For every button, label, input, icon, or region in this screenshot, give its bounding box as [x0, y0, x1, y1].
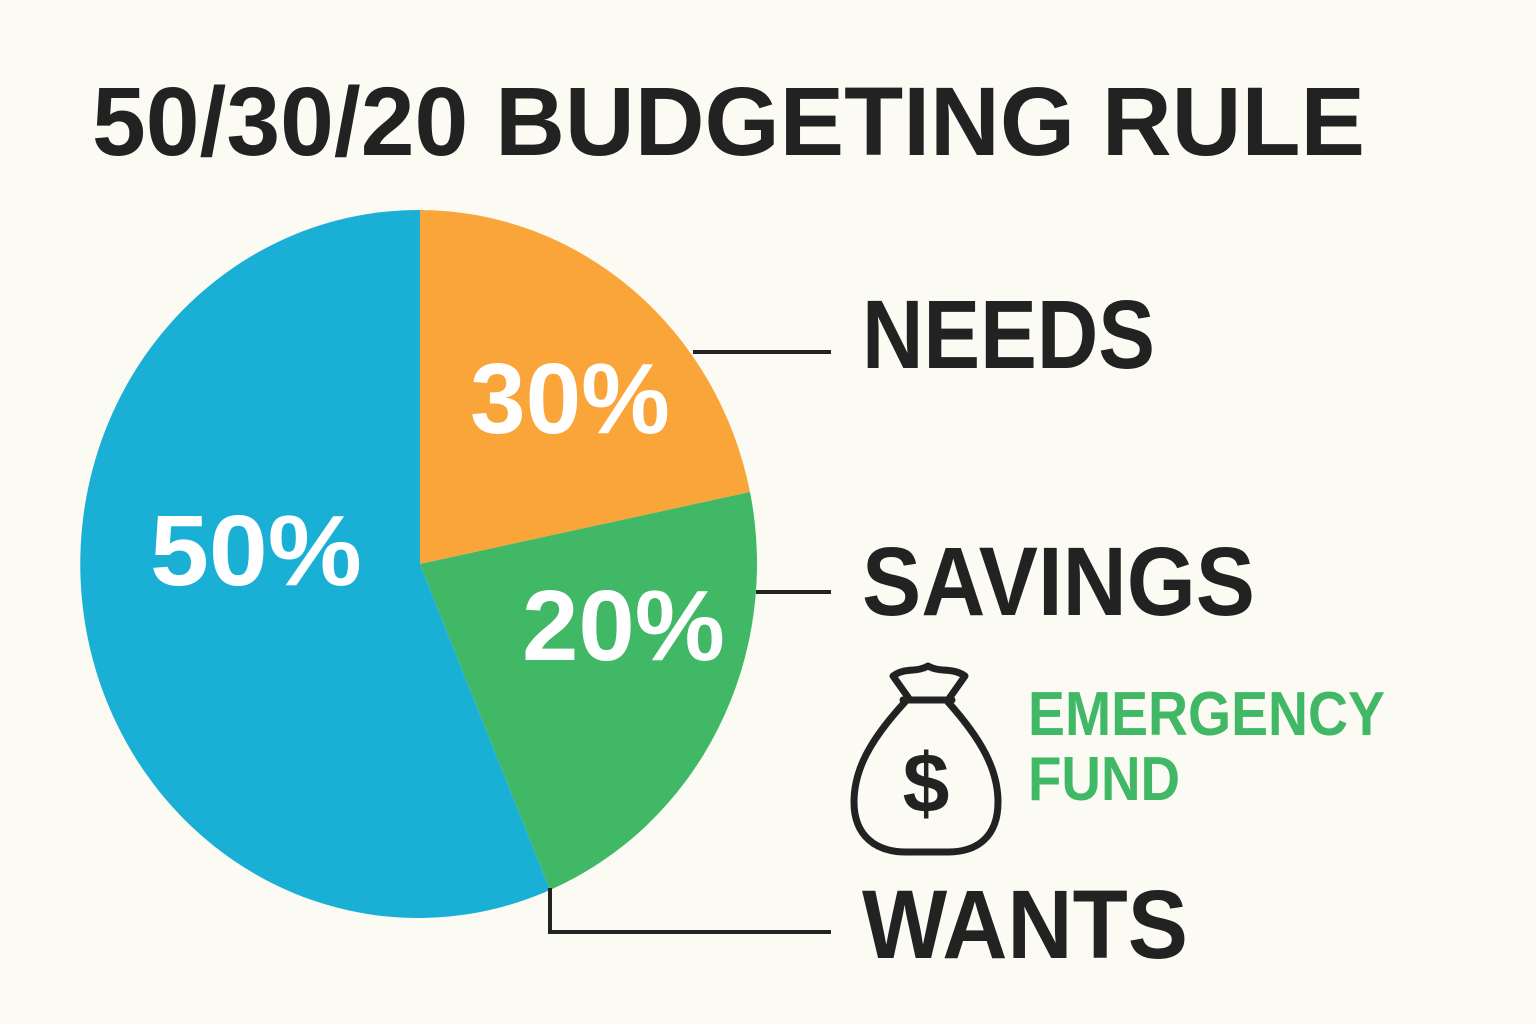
icon: money bag — [854, 666, 998, 852]
icon: money bag: $ — [903, 736, 949, 830]
label: WANTS: WANTS — [862, 870, 1188, 979]
label: SAVINGS: SAVINGS — [862, 527, 1255, 636]
label: NEEDS: NEEDS — [862, 280, 1155, 389]
callout: emergency fund: FUND — [1028, 745, 1180, 814]
label 20%: 20% — [522, 570, 725, 682]
label 30%: 30% — [470, 343, 670, 455]
leader line: needs — [693, 350, 831, 354]
leader line: savings — [756, 590, 831, 594]
pie chart — [80, 210, 757, 918]
callout: emergency fund — [1028, 680, 1385, 814]
slice: green 20% — [420, 492, 757, 890]
label 50%: 50% — [150, 495, 362, 607]
slice: orange 30% — [420, 210, 750, 564]
title: 50/30/20 BUDGETING RULE — [92, 67, 1365, 176]
leader line: wants — [550, 888, 831, 932]
callout: emergency fund: EMERGENCY — [1028, 680, 1385, 749]
slice: blue 50% — [80, 210, 550, 918]
